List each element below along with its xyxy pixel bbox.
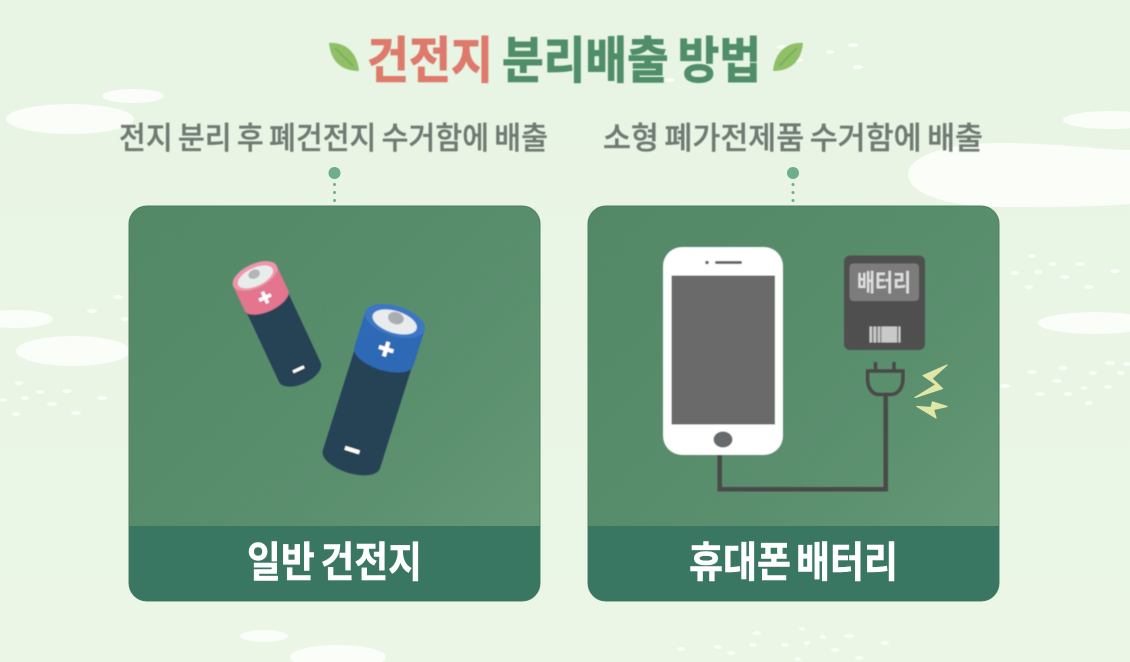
connector: right	[787, 167, 799, 202]
barcode	[870, 326, 900, 342]
title	[329, 33, 803, 89]
subheading: right: 소형 폐가전제품 수거함에 배출	[603, 121, 983, 156]
icon: plug	[868, 362, 903, 394]
icon: small pink battery	[228, 255, 327, 393]
icon: left leaf	[329, 43, 359, 71]
connector: left	[328, 167, 340, 202]
icon: smartphone	[663, 247, 783, 455]
subheading: left: 전지 분리 후 폐건전지 수거함에 배출	[119, 121, 548, 156]
title: green words: 분리배출 방법	[502, 33, 761, 89]
battery pack label: 배터리	[857, 270, 911, 297]
icon: battery pack	[844, 256, 925, 350]
panel label text: 휴대폰 배터리	[689, 539, 898, 586]
panel: general batteries	[129, 206, 540, 601]
panel label text: 일반 건전지	[247, 539, 422, 586]
icon: lightning bolts	[915, 365, 947, 418]
panel label band	[588, 526, 999, 601]
icon: right leaf	[773, 43, 803, 71]
panel: phone battery	[588, 206, 999, 601]
title: red words: 건전지	[367, 33, 493, 89]
cable	[720, 394, 886, 489]
icon: large blue battery	[318, 297, 429, 482]
panel label band	[129, 526, 540, 601]
